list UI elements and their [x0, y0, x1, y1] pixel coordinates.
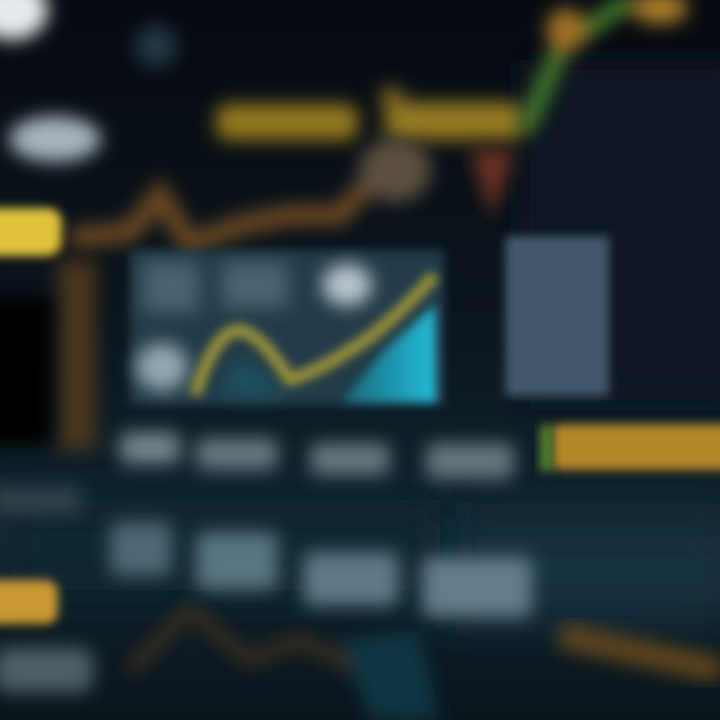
row labels — [0, 432, 514, 514]
bottom trend line — [130, 610, 440, 720]
title — [216, 86, 523, 140]
orange trend line — [70, 138, 515, 245]
line series — [195, 275, 435, 395]
chart panel background — [130, 250, 444, 405]
panel: right data table — [505, 236, 609, 396]
panel: chart — [130, 250, 444, 405]
rising green arrow — [525, 0, 688, 130]
lower left gray label — [0, 648, 93, 692]
upper left yellow label — [0, 208, 62, 256]
left vertical bar — [58, 260, 96, 450]
chart tiles — [136, 262, 372, 391]
black left panel — [0, 296, 52, 446]
icon: small top blob — [135, 25, 177, 67]
icon: top left glow — [0, 0, 48, 40]
icon: cloud blob — [9, 116, 101, 162]
cyan area — [345, 305, 436, 402]
callout: right orange bar — [540, 424, 720, 471]
lower left orange label — [0, 580, 58, 624]
bottom right orange label — [560, 635, 720, 670]
row of cards — [110, 522, 532, 617]
